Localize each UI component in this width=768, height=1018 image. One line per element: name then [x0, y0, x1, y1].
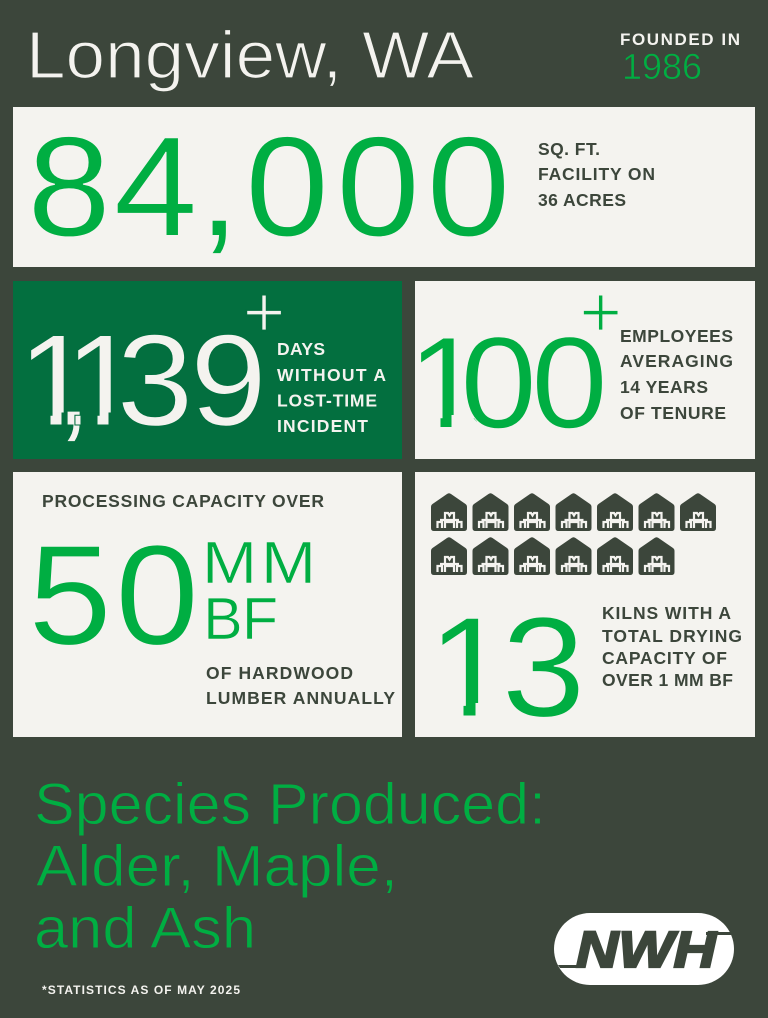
days label: INCIDENT — [277, 416, 368, 436]
species produced: and Ash — [34, 896, 256, 961]
panel: facility size — [13, 107, 755, 267]
species produced: Species Produced: — [34, 772, 546, 837]
panel: kilns — [415, 472, 755, 747]
kilns label — [602, 603, 742, 690]
kilns number: 13 — [427, 589, 585, 747]
species produced: Alder, Maple, — [36, 834, 398, 899]
employees label: AVERAGING — [620, 351, 733, 371]
logo: NWH — [576, 921, 717, 978]
employees label: 14 YEARS — [620, 377, 708, 397]
days label: LOST-TIME — [277, 390, 377, 410]
days label — [277, 339, 386, 436]
facility label — [538, 139, 655, 210]
capacity unit: BF — [203, 586, 278, 652]
founded label: FOUNDED IN — [620, 30, 740, 49]
days label: WITHOUT A — [277, 365, 386, 385]
employees label — [620, 326, 733, 423]
panel: capacity — [13, 472, 402, 737]
facility label: 36 ACRES — [538, 190, 626, 210]
employees label: OF TENURE — [620, 403, 726, 423]
capacity label: LUMBER ANNUALLY — [206, 688, 395, 708]
kilns label: KILNS WITH A — [602, 603, 731, 623]
facility label: FACILITY ON — [538, 164, 655, 184]
plus sign: + — [579, 272, 622, 353]
capacity label: OF HARDWOOD — [206, 663, 353, 683]
days number: 1,139 — [17, 309, 267, 453]
capacity heading: PROCESSING CAPACITY OVER — [42, 491, 324, 511]
employees label: EMPLOYEES — [620, 326, 733, 346]
kilns label: TOTAL DRYING — [602, 626, 742, 646]
capacity label — [206, 663, 395, 708]
capacity unit: MM — [202, 530, 316, 596]
species produced — [34, 772, 546, 961]
facility label: SQ. FT. — [538, 139, 600, 159]
kilns label: OVER 1 MM BF — [602, 670, 733, 690]
footnote: *STATISTICS AS OF MAY 2025 — [42, 983, 240, 997]
capacity number: 50 — [28, 517, 199, 675]
kiln icons — [431, 493, 716, 575]
panel: employees — [407, 272, 755, 459]
panel: safety days — [13, 272, 402, 459]
capacity unit — [202, 530, 316, 652]
title: Longview, WA — [26, 18, 474, 93]
plus sign: + — [243, 272, 285, 353]
employees number: 100 — [407, 311, 608, 456]
kilns label: CAPACITY OF — [602, 648, 727, 668]
founded label — [620, 30, 740, 87]
founded year: 1986 — [622, 46, 702, 87]
facility number: 84,000 — [27, 108, 510, 267]
days label: DAYS — [277, 339, 325, 359]
logo — [554, 913, 734, 985]
